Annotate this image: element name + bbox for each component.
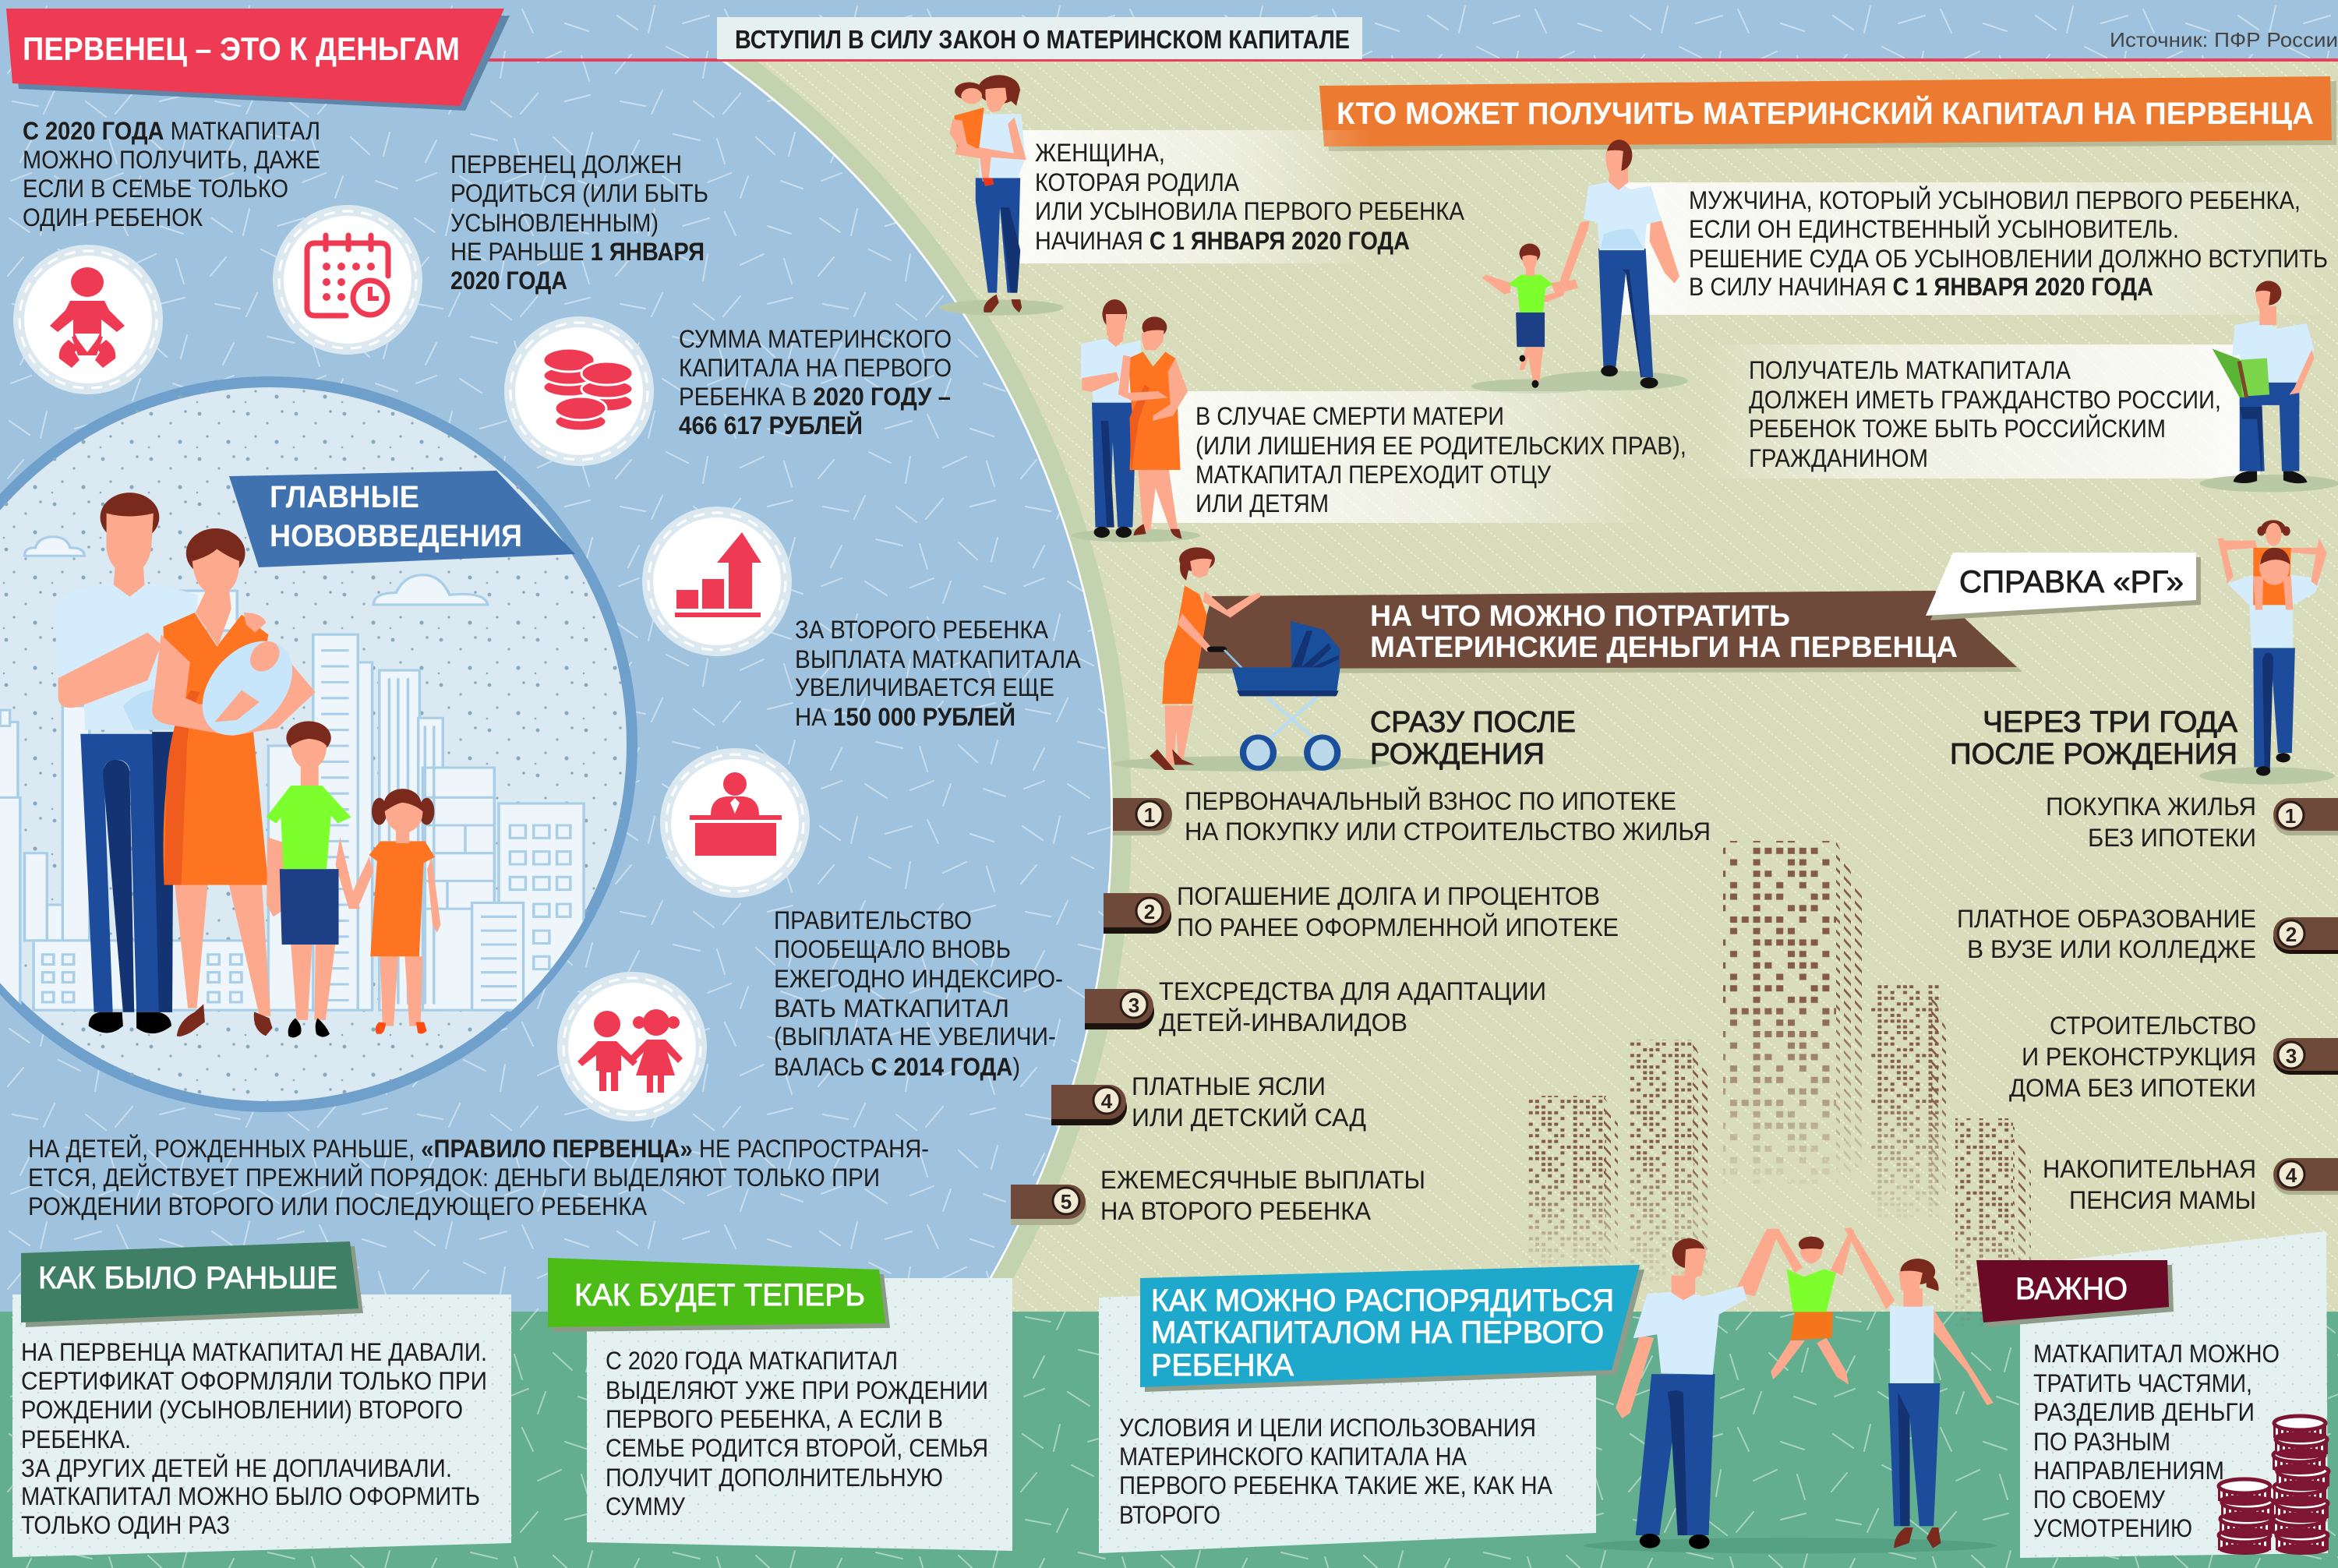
icon: two children [557, 972, 707, 1121]
list: three years after birth: 3 [2286, 1044, 2297, 1068]
text: first-born date [450, 150, 708, 295]
text: from 2020: ОДИН РЕБЕНОК [23, 203, 203, 231]
subheading: immediately after birth: СРАЗУ ПОСЛЕ [1370, 706, 1576, 739]
text: first-born rule note: РОЖДЕНИИ ВТОРОГО ИЛИ ПОСЛЕДУЮЩЕГО РЕБЕНКА [28, 1192, 648, 1220]
panel: how to dispose: РЕБЕНКА [1151, 1348, 1294, 1383]
text: sum: 466 617 РУБЛЕЙ [679, 411, 863, 440]
block: woman: НАЧИНАЯ С 1 ЯНВАРЯ 2020 ГОДА [1035, 227, 1410, 255]
icon: maroon coin stacks [2219, 1416, 2329, 1555]
list: three years after birth: В ВУЗЕ ИЛИ КОЛЛЕДЖЕ [1967, 935, 2256, 963]
block: recipient: ПОЛУЧАТЕЛЬ МАТКАПИТАЛА [1749, 356, 2071, 384]
text: first-born date: ПЕРВЕНЕЦ ДОЛЖЕН [450, 150, 682, 178]
list: three years after birth: И РЕКОНСТРУКЦИЯ [2022, 1043, 2256, 1071]
block: man adoptive father: В СИЛУ НАЧИНАЯ С 1 ЯНВАРЯ 2020 ГОДА [1689, 273, 2153, 301]
panel: how it was: НА ПЕРВЕНЦА МАТКАПИТАЛ НЕ ДАВАЛИ. [21, 1338, 487, 1366]
text: indexing: ВАЛАСЬ С 2014 ГОДА) [774, 1053, 1020, 1081]
list: three years after birth: НАКОПИТЕЛЬНАЯ [2043, 1155, 2256, 1183]
list: three years after birth [1957, 793, 2338, 1214]
block: mother's death: В СЛУЧАЕ СМЕРТИ МАТЕРИ [1195, 402, 1504, 430]
panel: important: ПО РАЗНЫМ [2033, 1428, 2170, 1456]
list: immediately after birth: НА ВТОРОГО РЕБЕНКА [1100, 1197, 1372, 1225]
block: mother's death: МАТКАПИТАЛ ПЕРЕХОДИТ ОТЦУ [1195, 461, 1552, 489]
title banner [6, 9, 510, 111]
tag: RG note [1926, 553, 2201, 620]
text: from 2020: ЕСЛИ В СЕМЬЕ ТОЛЬКО [23, 175, 288, 203]
icon: calendar [273, 205, 422, 355]
text: sum: РЕБЕНКА В 2020 ГОДУ – [679, 383, 951, 411]
illustration: family in city circle [0, 374, 647, 1114]
panel: how it was [12, 1241, 511, 1557]
list: immediately after birth: 3 [1128, 994, 1139, 1017]
banner: main innovations [229, 471, 575, 567]
banner: who can receive [1319, 76, 2336, 151]
block: woman: ИЛИ УСЫНОВИЛА ПЕРВОГО РЕБЕНКА [1035, 197, 1465, 225]
list: three years after birth: 2 [2286, 923, 2297, 946]
list: three years after birth: СТРОИТЕЛЬСТВО [2050, 1012, 2256, 1040]
list: immediately after birth: ТЕХСРЕДСТВА ДЛЯ АДАПТАЦИИ [1159, 977, 1546, 1005]
icon: baby [13, 245, 163, 394]
panel: how it was: РЕБЕНКА. [21, 1425, 131, 1453]
subheading: three years after birth [1950, 706, 2238, 771]
list: immediately after birth [1011, 787, 1711, 1225]
text: second child [795, 616, 1082, 731]
text: second child: НА 150 000 РУБЛЕЙ [795, 703, 1015, 731]
panel: how to dispose: МАТКАПИТАЛОМ НА ПЕРВОГО [1151, 1315, 1604, 1350]
text: sum [679, 325, 952, 440]
figure: man with book [2200, 281, 2338, 492]
subheading: three years after birth: ЧЕРЕЗ ТРИ ГОДА [1983, 706, 2238, 739]
subtitle tag [717, 17, 1362, 59]
figure: woman with stroller [1113, 547, 1391, 772]
panel: how to dispose: МАТЕРИНСКОГО КАПИТАЛА НА [1119, 1443, 1467, 1471]
block: woman: ЖЕНЩИНА, [1035, 139, 1165, 167]
block: recipient [1699, 344, 2260, 479]
block: recipient: ДОЛЖЕН ИМЕТЬ ГРАЖДАНСТВО РОССИИ, [1749, 386, 2221, 414]
rule line [483, 58, 2338, 62]
text: from 2020 [23, 117, 320, 231]
panel: how it will be: СУММУ [606, 1492, 686, 1520]
text: indexing: ЕЖЕГОДНО ИНДЕКСИРО- [774, 965, 1063, 993]
figure: man [1538, 139, 1688, 390]
panel: how it was: ЗА ДРУГИХ ДЕТЕЙ НЕ ДОПЛАЧИВАЛИ. [21, 1454, 452, 1482]
panel: how it was: МАТКАПИТАЛ МОЖНО БЫЛО ОФОРМИТЬ [21, 1482, 480, 1510]
text: first-born date: РОДИТЬСЯ (ИЛИ БЫТЬ [450, 179, 708, 207]
panel: important: ТРАТИТЬ ЧАСТЯМИ, [2033, 1369, 2252, 1397]
panel: how it will be: ВЫДЕЛЯЮТ УЖЕ ПРИ РОЖДЕНИИ [606, 1376, 988, 1404]
banner: what money can be spent on: МАТЕРИНСКИЕ ДЕНЬГИ НА ПЕРВЕНЦА [1370, 631, 1958, 664]
banner: what money can be spent on: НА ЧТО МОЖНО ПОТРАТИТЬ [1370, 600, 1790, 633]
panel: how to dispose [1099, 1265, 1644, 1553]
text: from 2020: С 2020 ГОДА МАТКАПИТАЛ [23, 117, 320, 145]
figure: boy [1471, 244, 1595, 394]
icon: coins [504, 316, 654, 466]
source: Источник: ПФР России [2110, 28, 2338, 51]
list: immediately after birth: НА ПОКУПКУ ИЛИ СТРОИТЕЛЬСТВО ЖИЛЬЯ [1185, 818, 1711, 846]
list: immediately after birth: ДЕТЕЙ-ИНВАЛИДОВ [1159, 1008, 1407, 1037]
figure: woman with child [939, 75, 1064, 316]
block: man adoptive father [1618, 182, 2338, 315]
list: immediately after birth: ПОГАШЕНИЕ ДОЛГА И ПРОЦЕНТОВ [1177, 882, 1600, 910]
list: three years after birth: ПЛАТНОЕ ОБРАЗОВАНИЕ [1957, 905, 2256, 933]
banner: main innovations: НОВОВВЕДЕНИЯ [270, 519, 522, 553]
background: green ground strip [0, 1312, 2338, 1568]
text: second child: УВЕЛИЧИВАЕТСЯ ЕЩЕ [795, 673, 1054, 701]
figure: family high five [1584, 1227, 1997, 1553]
panel: how to dispose: ВТОРОГО [1119, 1501, 1220, 1529]
panel: how it was: КАК БЫЛО РАНЬШЕ [38, 1261, 337, 1295]
list: immediately after birth: ПЛАТНЫЕ ЯСЛИ [1132, 1072, 1326, 1100]
panel: how to dispose: УСЛОВИЯ И ЦЕЛИ ИСПОЛЬЗОВАНИЯ [1119, 1414, 1536, 1442]
block: woman [1013, 130, 1465, 263]
block: woman: КОТОРАЯ РОДИЛА [1035, 168, 1240, 196]
list: three years after birth: 1 [2285, 804, 2296, 828]
text: first-born rule note [28, 1135, 929, 1220]
text: second child: ЗА ВТОРОГО РЕБЕНКА [795, 616, 1049, 644]
icon: official at desk [660, 748, 810, 898]
list: immediately after birth: 5 [1061, 1190, 1072, 1213]
title banner: ПЕРВЕНЕЦ – ЭТО К ДЕНЬГАМ [23, 30, 460, 67]
banner: main innovations: ГЛАВНЫЕ [270, 480, 419, 514]
block: recipient: РЕБЕНОК ТОЖЕ БЫТЬ РОССИЙСКИМ [1749, 415, 2166, 443]
text: indexing: (ВЫПЛАТА НЕ УВЕЛИЧИ- [774, 1022, 1056, 1051]
panel: how it was: СЕРТИФИКАТ ОФОРМЛЯЛИ ТОЛЬКО ПРИ [21, 1367, 487, 1395]
block: mother's death [1143, 391, 1686, 523]
list: three years after birth: ДОМА БЕЗ ИПОТЕКИ [2009, 1074, 2256, 1102]
panel: important: ВАЖНО [2015, 1272, 2128, 1306]
subtitle tag: ВСТУПИЛ В СИЛУ ЗАКОН О МАТЕРИНСКОМ КАПИТАЛЕ [735, 25, 1350, 54]
text: indexing: ВАТЬ МАТКАПИТАЛ [774, 994, 1009, 1022]
block: man adoptive father: ЕСЛИ ОН ЕДИНСТВЕННЫЙ УСЫНОВИТЕЛЬ. [1689, 215, 2179, 243]
list: immediately after birth: 2 [1144, 900, 1155, 923]
illustration: pixel buildings [1528, 841, 2031, 1329]
list: immediately after birth: ПО РАНЕЕ ОФОРМЛЕННОЙ ИПОТЕКЕ [1177, 913, 1619, 941]
list: immediately after birth: ИЛИ ДЕТСКИЙ САД [1132, 1104, 1366, 1132]
block: mother's death: (ИЛИ ЛИШЕНИЯ ЕЕ РОДИТЕЛЬСКИХ ПРАВ), [1195, 432, 1686, 460]
tag: RG note: СПРАВКА «РГ» [1959, 565, 2184, 599]
panel: important: ПО СВОЕМУ [2033, 1485, 2166, 1513]
panel: how it will be: СЕМЬЕ РОДИТСЯ ВТОРОЙ, СЕМЬЯ [606, 1434, 988, 1462]
subheading: immediately after birth [1370, 706, 1576, 771]
banner: who can receive: КТО МОЖЕТ ПОЛУЧИТЬ МАТЕРИНСКИЙ КАПИТАЛ НА ПЕРВЕНЦА [1337, 95, 2314, 131]
panel: how it will be: С 2020 ГОДА МАТКАПИТАЛ [606, 1347, 898, 1375]
subheading: immediately after birth: РОЖДЕНИЯ [1370, 738, 1545, 771]
panel: how it will be: КАК БУДЕТ ТЕПЕРЬ [574, 1278, 865, 1312]
text: sum: КАПИТАЛА НА ПЕРВОГО [679, 354, 952, 382]
list: immediately after birth: 1 [1144, 803, 1155, 827]
panel: how to dispose: КАК МОЖНО РАСПОРЯДИТЬСЯ [1151, 1284, 1614, 1318]
panel: important: НАПРАВЛЕНИЯМ [2033, 1457, 2224, 1485]
text: indexing: ПООБЕЩАЛО ВНОВЬ [774, 935, 1011, 963]
text: indexing: ПРАВИТЕЛЬСТВО [774, 906, 972, 934]
panel: important: РАЗДЕЛИВ ДЕНЬГИ [2033, 1398, 2255, 1426]
panel: important [1976, 1231, 2328, 1558]
figure: father with girl on shoulders [2199, 520, 2335, 785]
text: first-born rule note: НА ДЕТЕЙ, РОЖДЕННЫХ РАНЬШЕ, «ПРАВИЛО ПЕРВЕНЦА» НЕ РАСПРОСТРАНЯ- [28, 1135, 929, 1163]
text: indexing [774, 906, 1063, 1081]
text: first-born date: НЕ РАНЬШЕ 1 ЯНВАРЯ [450, 238, 705, 266]
list: three years after birth: ПЕНСИЯ МАМЫ [2069, 1186, 2256, 1214]
list: three years after birth: 4 [2286, 1164, 2297, 1187]
text: first-born date: 2020 ГОДА [450, 267, 567, 295]
panel: how to dispose: ПЕРВОГО РЕБЕНКА ТАКИЕ ЖЕ, КАК НА [1119, 1471, 1553, 1499]
icon: growth chart [642, 507, 792, 656]
list: immediately after birth: ПЕРВОНАЧАЛЬНЫЙ ВЗНОС ПО ИПОТЕКЕ [1185, 787, 1676, 815]
figure: pregnant couple [1071, 299, 1200, 542]
text: first-born date: УСЫНОВЛЕННЫМ) [450, 209, 659, 237]
banner: what money can be spent on [1192, 591, 2022, 673]
panel: how it will be: ПОЛУЧИТ ДОПОЛНИТЕЛЬНУЮ [606, 1464, 943, 1492]
list: three years after birth: БЕЗ ИПОТЕКИ [2088, 824, 2256, 852]
panel: important: УСМОТРЕНИЮ [2033, 1514, 2192, 1542]
block: recipient: ГРАЖДАНИНОМ [1749, 444, 1928, 472]
text: sum: СУММА МАТЕРИНСКОГО [679, 325, 952, 353]
text: second child: ВЫПЛАТА МАТКАПИТАЛА [795, 645, 1082, 673]
panel: how it was: РОЖДЕНИИ (УСЫНОВЛЕНИИ) ВТОРОГО [21, 1396, 463, 1424]
text: first-born rule note: ЕТСЯ, ДЕЙСТВУЕТ ПРЕЖНИЙ ПОРЯДОК: ДЕНЬГИ ВЫДЕЛЯЮТ ТОЛЬКО ПРИ [28, 1164, 880, 1192]
panel: how it was: ТОЛЬКО ОДИН РАЗ [21, 1511, 230, 1539]
list: three years after birth: ПОКУПКА ЖИЛЬЯ [2046, 793, 2256, 821]
text: from 2020: МОЖНО ПОЛУЧИТЬ, ДАЖЕ [23, 146, 320, 174]
panel: how it will be: ПЕРВОГО РЕБЕНКА, А ЕСЛИ В [606, 1405, 943, 1433]
list: immediately after birth: ЕЖЕМЕСЯЧНЫЕ ВЫПЛАТЫ [1100, 1166, 1425, 1194]
list: immediately after birth: 4 [1101, 1089, 1113, 1113]
subheading: three years after birth: ПОСЛЕ РОЖДЕНИЯ [1950, 738, 2237, 771]
block: mother's death: ИЛИ ДЕТЯМ [1195, 489, 1329, 517]
panel: how it will be [548, 1258, 1012, 1551]
panel: important: МАТКАПИТАЛ МОЖНО [2033, 1340, 2280, 1368]
